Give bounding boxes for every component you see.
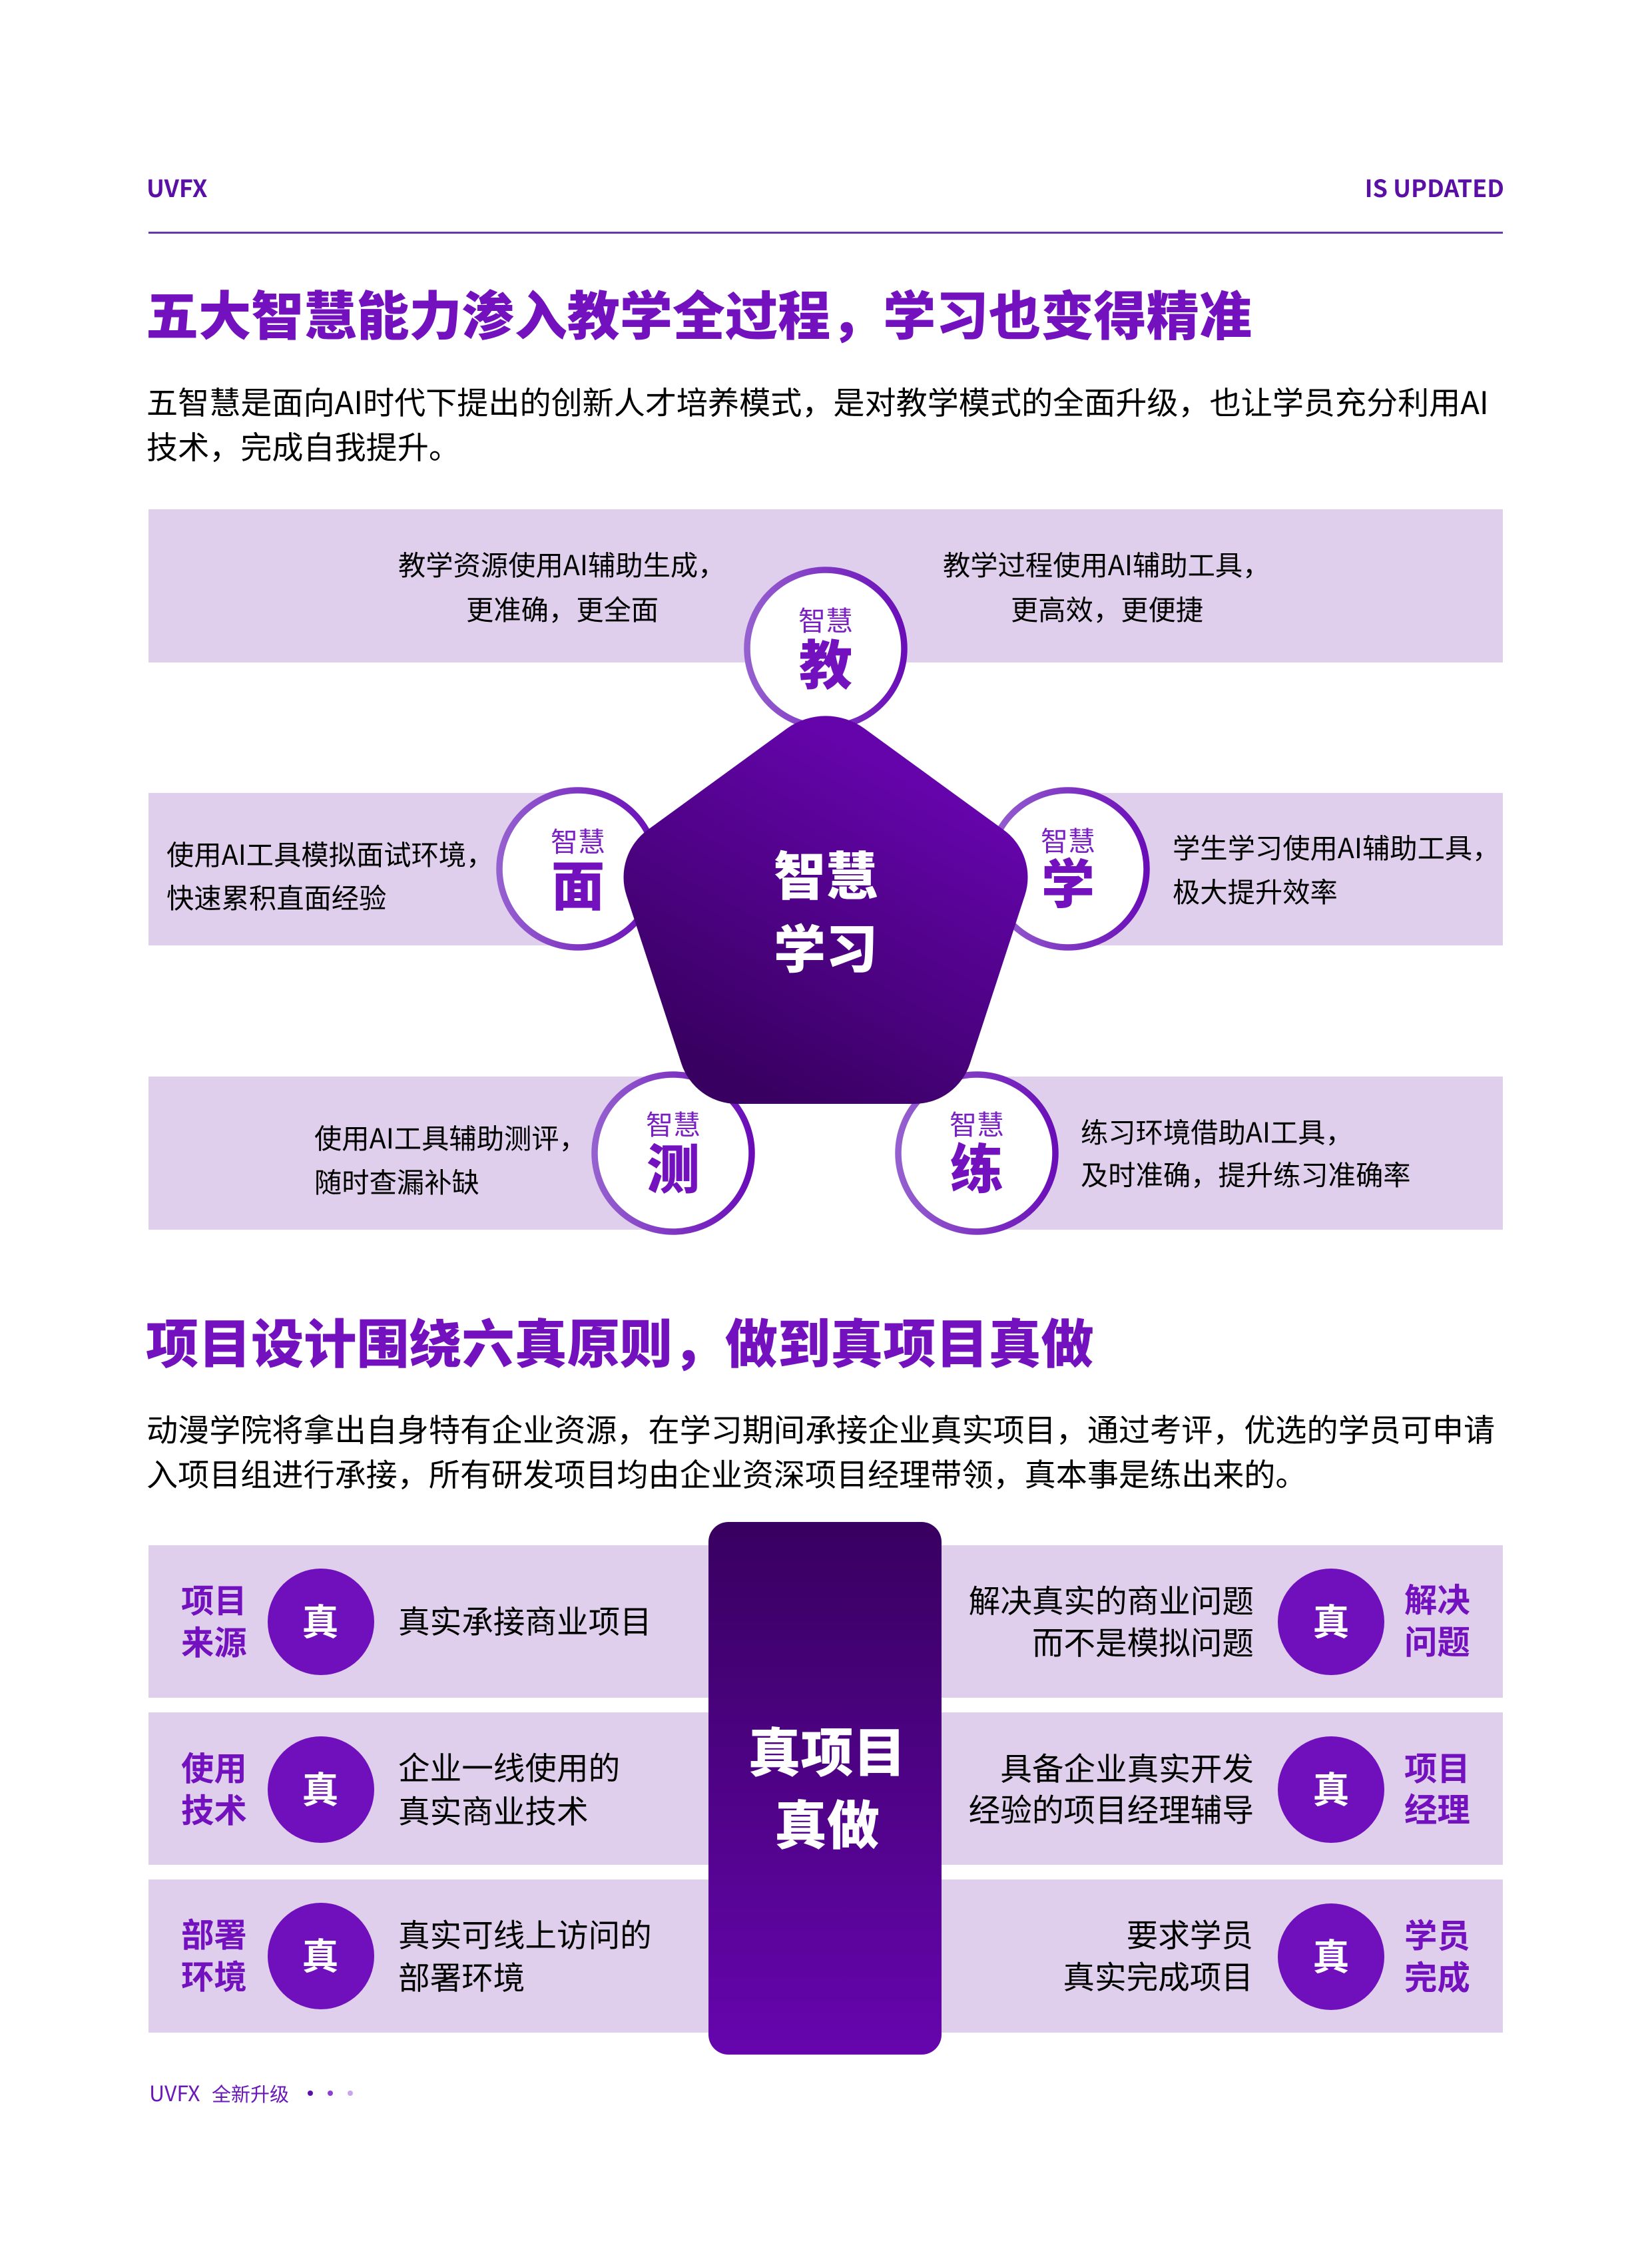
footer: UVFX	[149, 2077, 200, 2108]
row: project source: 来源	[181, 1617, 247, 1664]
row: technology: 技术	[181, 1785, 247, 1832]
text: teaching resources: 更准确，更全面	[466, 588, 659, 628]
row: technology: 企业一线使用的	[398, 1743, 620, 1789]
header	[146, 170, 1504, 234]
row: deployment: 部署	[181, 1909, 247, 1957]
row: project source	[148, 1545, 714, 1698]
circle: teach: 智慧	[798, 599, 853, 638]
row: deployment: 部署环境	[398, 1953, 525, 1999]
row: project manager: 真	[1312, 1760, 1350, 1814]
text block: section 2 intro: 入项目组进行承接，所有研发项目均由企业资深项目经理带领，真本事是练出来的。	[146, 1449, 1306, 1495]
row: solve problems: 问题	[1404, 1617, 1470, 1664]
text: teaching process: 更高效，更便捷	[1011, 588, 1203, 628]
row: technology: 真	[302, 1760, 339, 1814]
row: solve problems	[936, 1545, 1503, 1698]
text: practice	[1081, 1111, 1411, 1193]
footer	[149, 2077, 353, 2108]
text: learning: 学生学习使用AI辅助工具，	[1173, 826, 1500, 866]
row: project manager: 经验的项目经理辅导	[969, 1785, 1254, 1831]
row: solve problems: 解决	[1404, 1575, 1470, 1622]
row: project manager	[936, 1712, 1503, 1865]
header left label: UVFX	[146, 170, 208, 204]
circle: teach: 教	[799, 623, 852, 700]
text: testing: 随时查漏补缺	[314, 1160, 479, 1200]
circle: test: 测	[647, 1127, 700, 1204]
row: project manager: 具备企业真实开发	[1000, 1744, 1254, 1790]
text: testing	[314, 1117, 587, 1200]
text: interview: 快速累积直面经验	[166, 876, 386, 916]
text: interview: 使用AI工具模拟面试环境，	[166, 833, 493, 873]
text: teaching process	[943, 543, 1270, 628]
text: testing: 使用AI工具辅助测评，	[314, 1117, 587, 1156]
circle: practice	[898, 1075, 1055, 1232]
row: solve problems: 真	[1312, 1593, 1350, 1646]
row: student completion: 要求学员	[1127, 1910, 1253, 1956]
circle: interview: 智慧	[551, 820, 605, 860]
band: bottom right	[977, 1077, 1503, 1230]
circle: interview: 面	[551, 844, 605, 921]
circle: learn	[989, 790, 1147, 947]
circle: teach	[747, 570, 904, 727]
row: solve problems: 而不是模拟问题	[1032, 1618, 1254, 1664]
circle: practice: 智慧	[950, 1103, 1004, 1142]
row: student completion: 真	[1312, 1927, 1350, 1981]
pillar: real project real work	[708, 1522, 942, 2055]
text: learning: 极大提升效率	[1173, 870, 1338, 910]
row: project manager: 项目	[1404, 1743, 1470, 1790]
band: top	[148, 509, 1503, 662]
text block: section 1 intro: 技术，完成自我提升。	[146, 422, 460, 468]
row: solve problems: 解决真实的商业问题	[969, 1576, 1254, 1622]
circle: test: 智慧	[646, 1103, 700, 1142]
circle: test	[595, 1075, 752, 1232]
row: deployment	[148, 1879, 714, 2033]
row: project manager: 经理	[1404, 1784, 1470, 1832]
text: teaching resources: 教学资源使用AI辅助生成，	[398, 543, 725, 583]
text: teaching process: 教学过程使用AI辅助工具，	[943, 543, 1270, 583]
text: interview	[166, 833, 493, 916]
pillar: real project real work: 真做	[774, 1783, 880, 1860]
circle: interview	[499, 790, 657, 947]
heading: section 2: 项目设计围绕六真原则，做到真项目真做	[146, 1302, 1094, 1378]
row: student completion: 完成	[1404, 1952, 1470, 1999]
band: bottom left	[148, 1077, 673, 1230]
text block: section 2 intro: 动漫学院将拿出自身特有企业资源，在学习期间承接企业真实项目，通过考评，优选的学员可申请	[146, 1405, 1495, 1451]
band: middle right	[1068, 793, 1503, 945]
text: practice: 练习环境借助AI工具，	[1081, 1111, 1353, 1150]
text block: section 2 intro	[146, 1405, 1495, 1495]
pillar: real project real work: 真项目	[748, 1710, 906, 1787]
text: learning	[1173, 826, 1500, 910]
circle: learn: 学	[1041, 842, 1095, 919]
pentagon: smart learning	[623, 716, 1028, 1104]
circle: learn: 智慧	[1041, 819, 1095, 859]
band: middle left	[148, 793, 578, 945]
row: deployment: 环境	[181, 1951, 247, 1999]
row: technology: 使用	[181, 1743, 247, 1790]
text: teaching resources	[398, 543, 725, 628]
header right label: IS UPDATED	[1365, 170, 1504, 204]
row: student completion	[936, 1879, 1503, 2033]
row: student completion: 学员	[1404, 1910, 1470, 1957]
panel: six real principles	[148, 1522, 1503, 2055]
row: technology: 真实商业技术	[398, 1786, 589, 1832]
pentagon: smart learning: 学习	[774, 909, 878, 983]
row: project source: 真实承接商业项目	[398, 1597, 652, 1642]
text block: section 1 intro	[146, 377, 1489, 468]
row: deployment: 真实可线上访问的	[398, 1910, 652, 1956]
heading: section 1: 五大智慧能力渗入教学全过程，学习也变得精准	[146, 274, 1252, 350]
row: project source: 项目	[181, 1575, 247, 1622]
row: project source: 真	[302, 1593, 339, 1646]
text: practice: 及时准确，提升练习准确率	[1081, 1153, 1411, 1193]
row: technology	[148, 1712, 714, 1865]
row: deployment: 真	[302, 1927, 339, 1980]
text block: section 1 intro: 五智慧是面向AI时代下提出的创新人才培养模式，是对教学模式的全面升级，也让学员充分利用AI	[146, 377, 1489, 423]
footer: 全新升级	[212, 2079, 289, 2107]
panel: five smart abilities diagram	[148, 509, 1503, 1232]
pentagon: smart learning: 智慧	[774, 836, 878, 910]
row: student completion: 真实完成项目	[1063, 1952, 1253, 1998]
circle: practice: 练	[950, 1127, 1003, 1204]
